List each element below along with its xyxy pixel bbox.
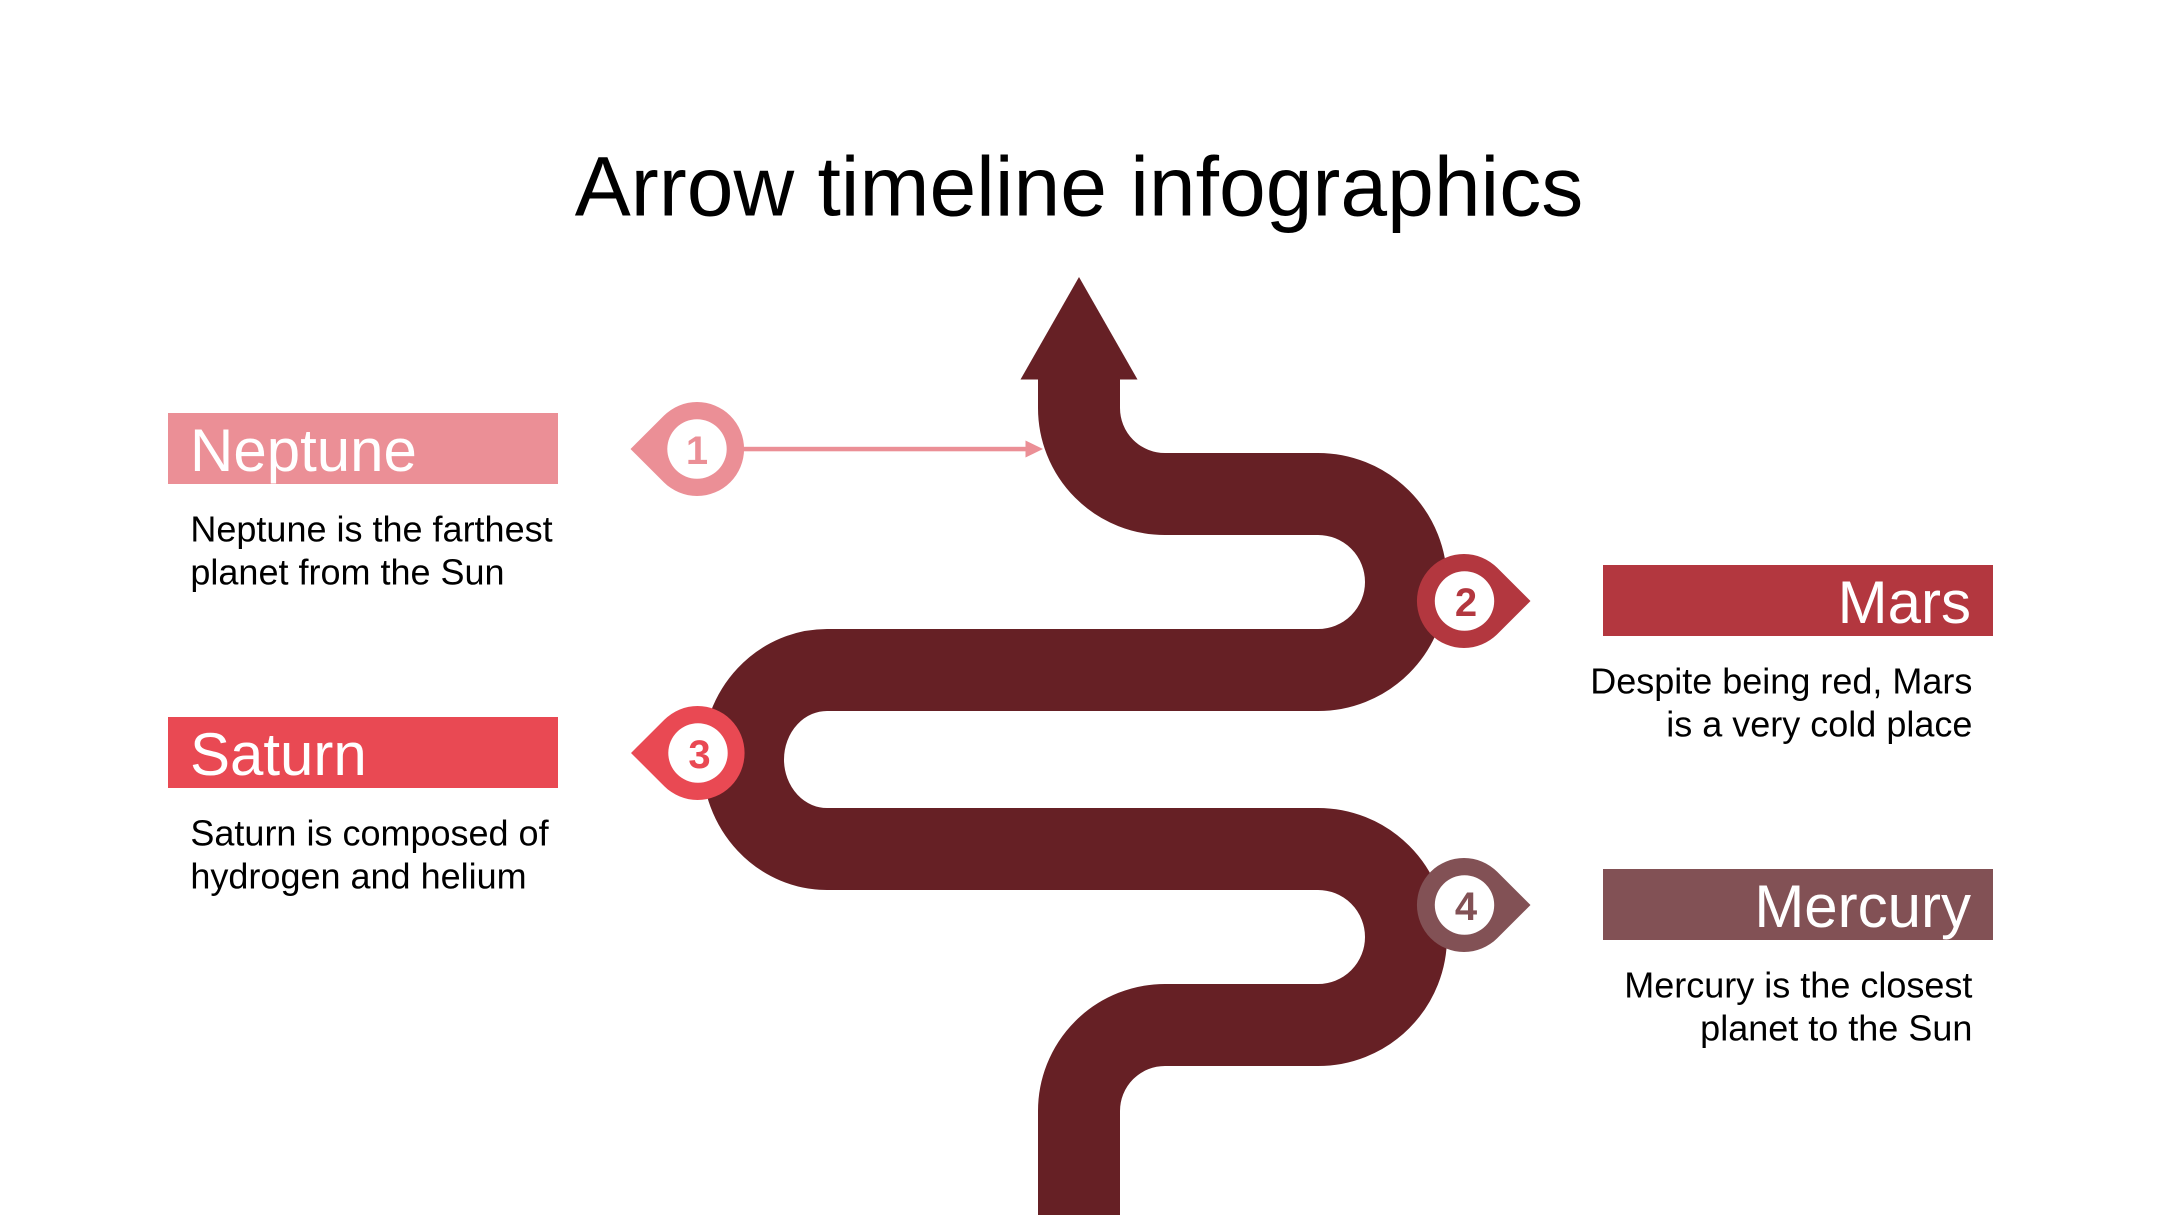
panel: Saturn: hydrogen and helium [190,855,527,896]
panel: Saturn [168,717,558,896]
panel: Saturn: Saturn is composed of [190,812,550,853]
panel: Neptune: Neptune [190,417,417,484]
marker 3: 3 [688,733,711,777]
panel: Mars: Mars [1838,569,1971,636]
panel: Mercury [1603,869,1993,1048]
panel: Neptune: planet from the Sun [190,551,505,592]
connector arrow: marker 1 to timeline [740,440,1043,458]
panel: Mars [1590,565,1993,744]
panel: Mercury: Mercury is the closest [1624,964,1972,1005]
winding timeline arrow [743,277,1406,1215]
panel: Neptune [168,413,558,592]
marker 1: 1 [686,429,708,473]
marker 1 [630,402,744,496]
panel: Mercury: planet to the Sun [1700,1007,1972,1048]
panel: Mercury: Mercury [1754,873,1971,940]
panel: Mars: Despite being red, Mars [1590,660,1972,701]
marker 2 [1417,554,1530,648]
panel: Mars: is a very cold place [1666,703,1972,744]
panel: Saturn: Saturn [190,721,367,788]
marker 3 [631,706,745,800]
marker 2: 2 [1455,581,1477,625]
marker 4 [1417,858,1530,952]
title: Arrow timeline infographics [575,140,1583,234]
marker 4: 4 [1455,885,1478,929]
panel: Neptune: Neptune is the farthest [190,508,553,549]
